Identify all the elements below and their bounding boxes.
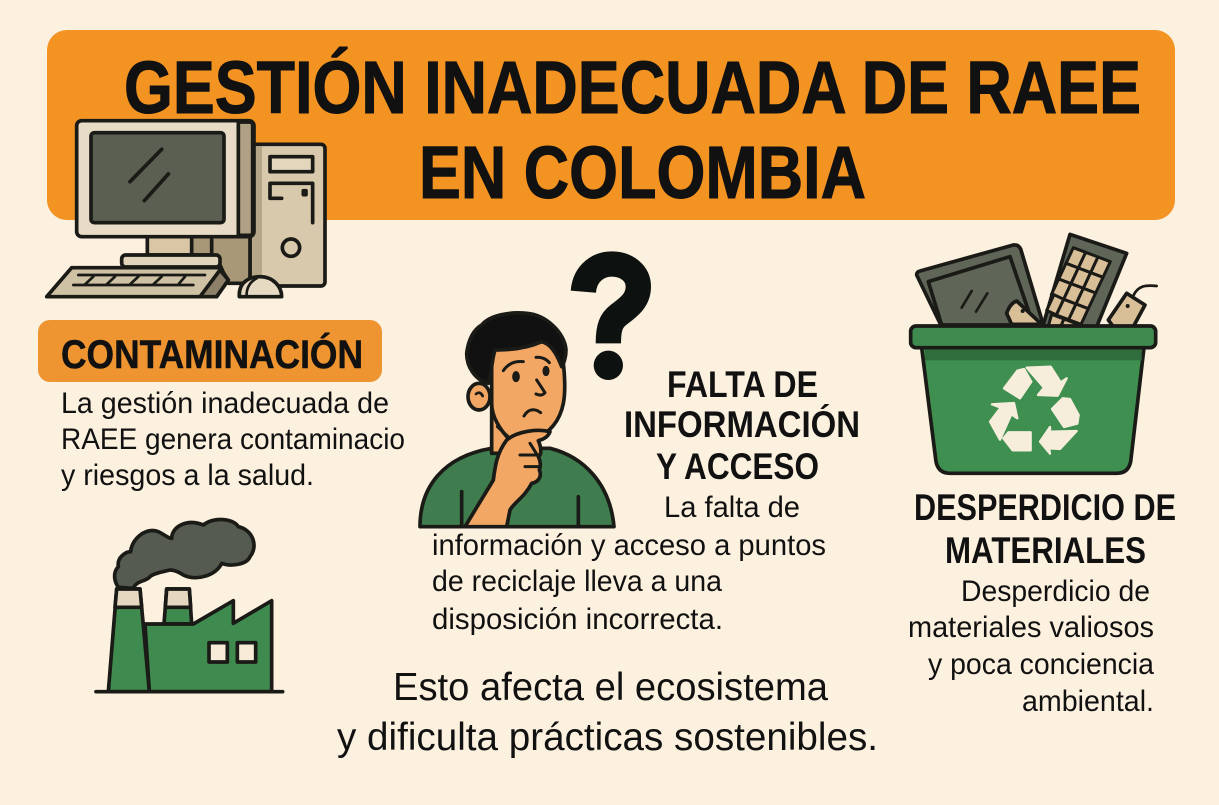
title: EN COLOMBIA <box>419 131 866 214</box>
text: contaminación description: RAEE genera contaminacio <box>61 423 405 456</box>
text: falta de información description: La falta de <box>664 491 800 524</box>
heading: falta de información y acceso: Y ACCESO <box>656 446 819 487</box>
heading: falta de información y acceso: INFORMACIÓN <box>624 403 860 445</box>
heading: desperdicio de materiales: MATERIALES <box>945 530 1146 571</box>
text: falta de información description <box>432 491 826 636</box>
heading pill: contaminación <box>38 320 382 382</box>
icon: recycling symbol <box>990 367 1079 454</box>
panel: contaminación <box>38 320 405 492</box>
text: contaminación description: y riesgos a la salud. <box>61 459 314 492</box>
title banner <box>47 30 1175 220</box>
text: conclusion <box>337 666 878 759</box>
text: falta de información description: de reciclaje lleva a una <box>432 565 723 598</box>
icon: thinking person <box>420 313 614 527</box>
text: contaminación description: La gestión inadecuada de <box>61 387 389 420</box>
text: desperdicio description: Desperdicio de <box>961 575 1150 608</box>
text: falta de información description: disposición incorrecta. <box>432 603 723 636</box>
text: falta de información description: información y acceso a puntos <box>432 529 826 562</box>
text: desperdicio description: ambiental. <box>1022 685 1154 718</box>
panel: desperdicio de materiales <box>908 487 1176 718</box>
title <box>124 46 1141 214</box>
panel: falta de información <box>432 364 860 636</box>
heading pill: contaminación: CONTAMINACIÓN <box>61 331 363 377</box>
icon: factory with smoke <box>96 520 283 692</box>
heading: falta de información y acceso <box>624 364 860 487</box>
text: desperdicio description <box>908 575 1155 718</box>
text: conclusion: y dificulta prácticas sostenibles. <box>337 716 878 759</box>
text: desperdicio description: materiales valiosos <box>908 611 1154 644</box>
heading: desperdicio de materiales <box>914 487 1176 571</box>
icon: desktop computer <box>47 121 325 297</box>
icon: recycling bin with e-waste <box>911 234 1157 473</box>
icon: question mark <box>583 264 638 380</box>
text: desperdicio description: y poca conciencia <box>928 648 1155 681</box>
heading: falta de información y acceso: FALTA DE <box>667 364 818 405</box>
text: contaminación description <box>61 387 405 492</box>
text: conclusion: Esto afecta el ecosistema <box>393 666 828 709</box>
